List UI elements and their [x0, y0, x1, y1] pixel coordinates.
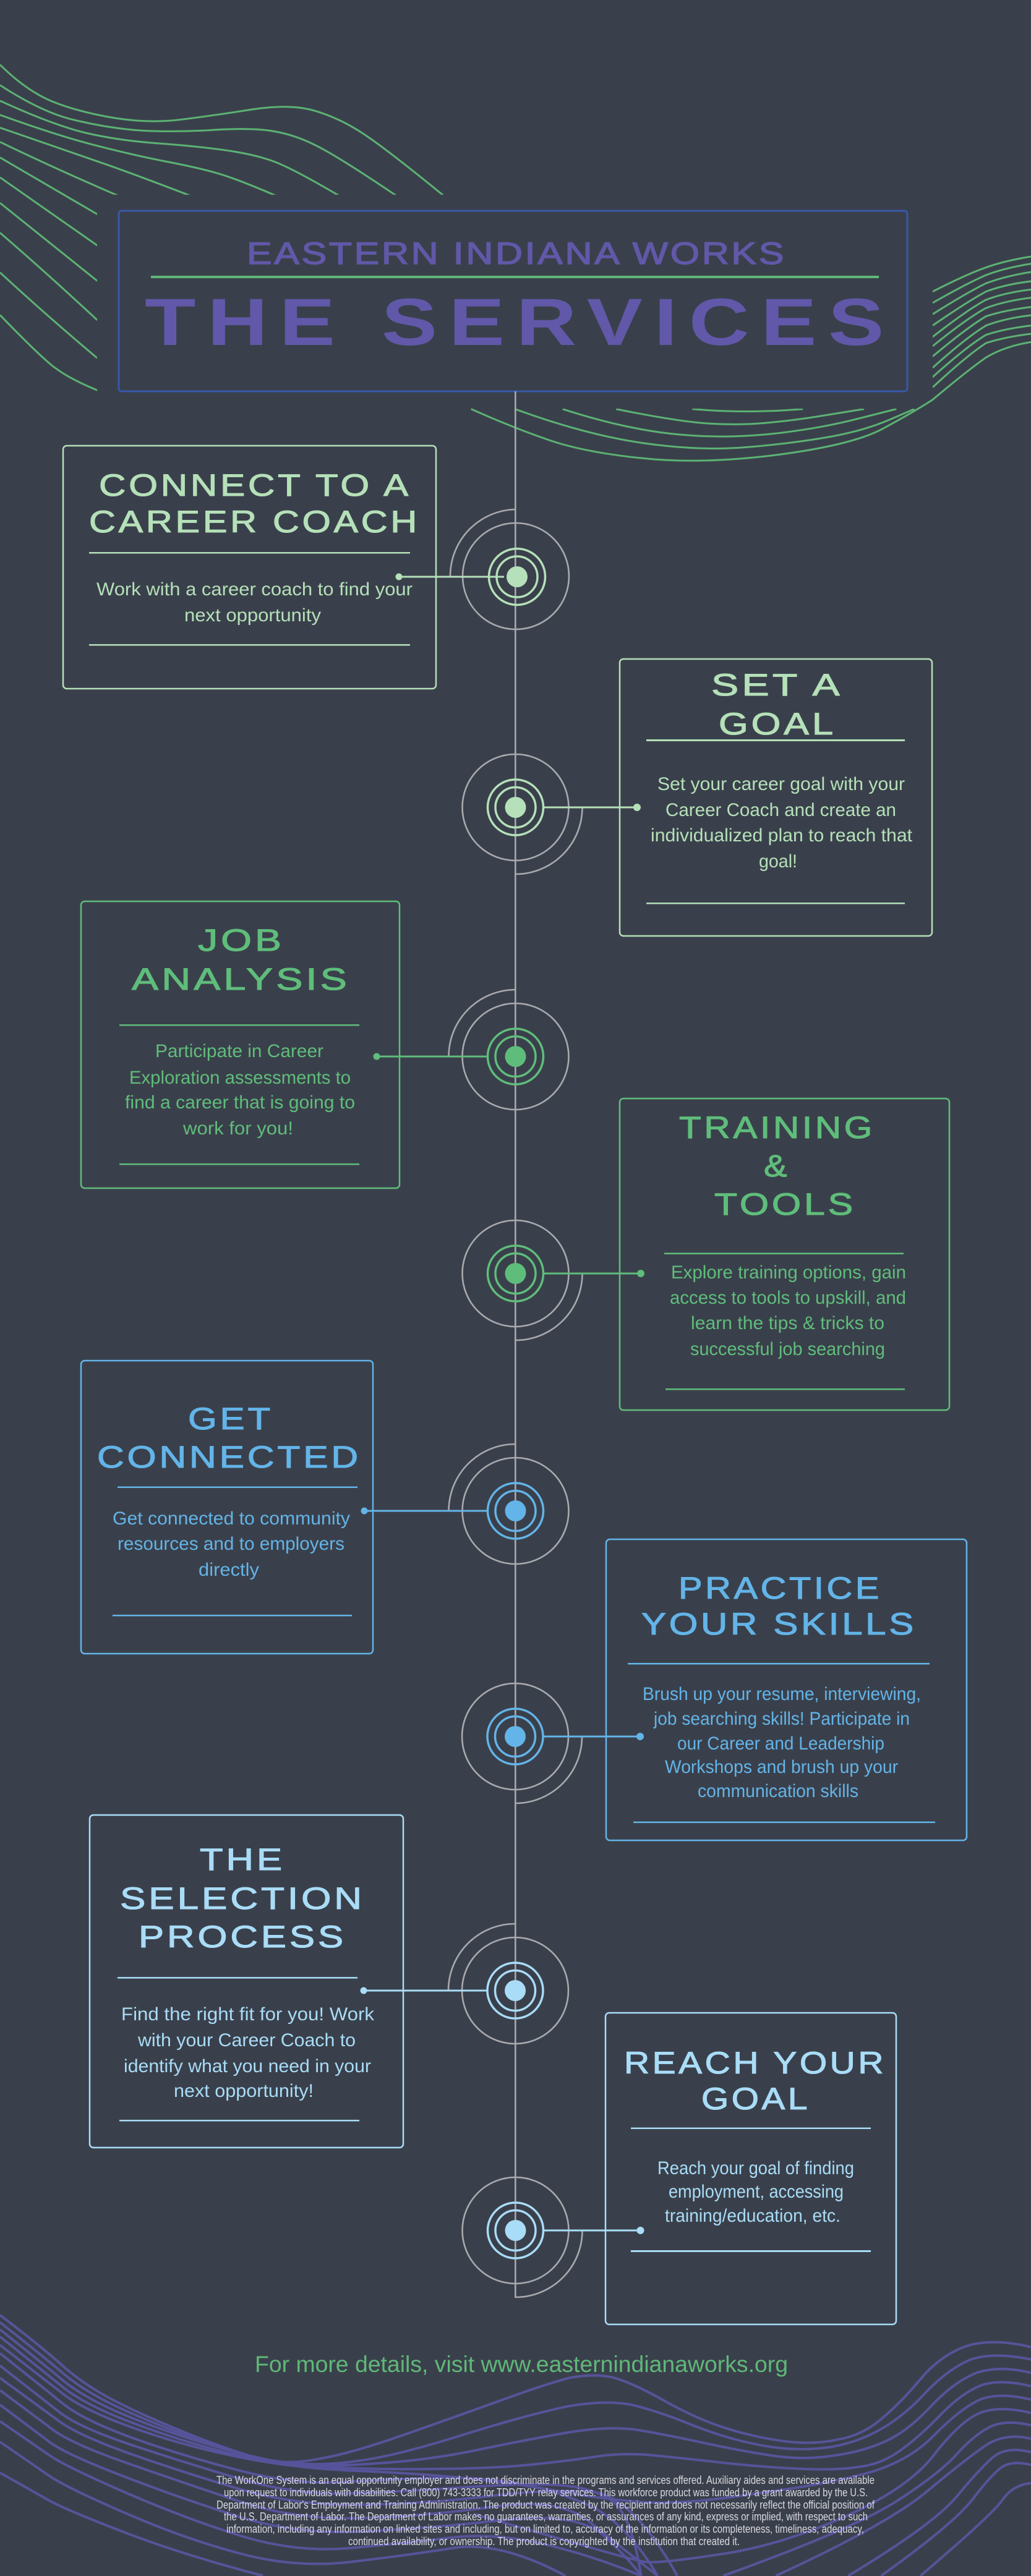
description: Find the right fit for you! Work — [121, 2004, 375, 2025]
description: goal! — [759, 851, 797, 872]
heading: JOB — [198, 923, 284, 958]
heading: TOOLS — [714, 1187, 856, 1222]
description: access to tools to upskill, and — [670, 1288, 906, 1308]
legal disclaimer: Department of Labor's Employment and Training Administration. The product was created by the recipient and does not necessarily reflect the official position of — [216, 2499, 875, 2511]
heading — [120, 1842, 365, 1954]
description: Get connected to community — [113, 1508, 350, 1529]
card 8: reach your goal — [605, 2013, 896, 2324]
heading: ANALYSIS — [132, 962, 350, 997]
description — [113, 1508, 350, 1580]
description: Reach your goal of finding — [657, 2158, 854, 2179]
node 3 — [374, 990, 569, 1110]
description: communication skills — [698, 1781, 858, 1801]
heading — [89, 468, 420, 539]
description: Participate in Career — [155, 1041, 323, 1061]
card 2: set a goal — [620, 659, 932, 936]
description: learn the tips & tricks to — [691, 1313, 884, 1333]
description: Career Coach and create an — [665, 800, 896, 820]
description — [657, 2158, 854, 2226]
description — [125, 1041, 355, 1139]
description: with your Career Coach to — [137, 2030, 356, 2051]
bottom purple wave lines — [0, 2315, 1031, 2576]
heading: PROCESS — [139, 1919, 346, 1954]
legal disclaimer: The WorkOne System is an equal opportunity employer and does not discriminate in the programs and services offered. Auxiliary aides and services are available — [216, 2474, 875, 2486]
description: resources and to employers — [118, 1534, 344, 1554]
card 1: connect to a career coach — [63, 446, 436, 689]
card 3: job analysis — [81, 901, 400, 1188]
legal disclaimer: the U.S. Department of Labor. The Department of Labor makes no guarantees, warranties, or assurances of any kind, express or implied, with respect to such — [224, 2510, 868, 2523]
heading: TRAINING — [679, 1110, 875, 1145]
heading: GET — [188, 1401, 273, 1436]
heading: YOUR SKILLS — [641, 1607, 917, 1641]
description: successful job searching — [690, 1339, 885, 1359]
description: next opportunity! — [174, 2081, 314, 2101]
description: job searching skills! Participate in — [653, 1709, 910, 1729]
heading: CONNECT TO A — [99, 468, 411, 503]
heading: THE — [200, 1842, 285, 1877]
lowest green arc joining the right wave — [471, 342, 1031, 461]
node 6 — [462, 1683, 644, 1803]
legal disclaimer — [216, 2474, 875, 2548]
heading: GOAL — [719, 707, 836, 741]
legal disclaimer: information, including any information on linked sites and including, but on limited to, accuracy of the information or its completeness, timeliness, adequacy, — [226, 2523, 864, 2535]
card 7: the selection process — [90, 1815, 403, 2148]
description: work for you! — [182, 1118, 293, 1139]
website call to action: For more details, visit www.easternindianaworks.org — [255, 2352, 788, 2377]
subtitle: EASTERN INDIANA WORKS — [247, 236, 786, 271]
description — [670, 1262, 906, 1359]
description: individualized plan to reach that — [651, 825, 913, 846]
description: find a career that is going to — [125, 1092, 355, 1113]
description: employment, accessing — [669, 2182, 844, 2202]
description: Brush up your resume, interviewing, — [643, 1684, 921, 1704]
description: Work with a career coach to find your — [96, 579, 413, 600]
title panel — [119, 211, 907, 391]
description: Explore training options, gain — [671, 1262, 906, 1283]
card 6: practice your skills — [606, 1539, 967, 1840]
description: our Career and Leadership — [677, 1733, 884, 1754]
heading: SELECTION — [120, 1881, 365, 1916]
description — [121, 2004, 375, 2101]
heading: REACH YOUR — [624, 2046, 886, 2080]
card 5: get connected — [81, 1361, 373, 1654]
node 7 — [360, 1924, 568, 2044]
heading — [711, 668, 843, 741]
node 8 — [463, 2177, 644, 2297]
right green wave lines — [515, 257, 1031, 449]
wave mask behind title — [97, 195, 933, 409]
node 5 — [361, 1444, 569, 1564]
description: directly — [199, 1560, 259, 1580]
heading — [132, 923, 350, 997]
node 2 — [463, 754, 641, 874]
description — [643, 1684, 921, 1801]
node 4 — [463, 1220, 644, 1340]
description: Set your career goal with your — [657, 774, 905, 794]
heading: CONNECTED — [97, 1440, 361, 1474]
heading — [624, 2046, 886, 2116]
heading: PRACTICE — [678, 1571, 882, 1605]
heading: GOAL — [701, 2081, 810, 2116]
card 4: training and tools — [620, 1099, 949, 1410]
legal disclaimer: upon request to individuals with disabilities. Call (800) 743-3333 for TDD/TYY relay services. This workforce product was funded by a grant awarded by the U.S. — [224, 2486, 868, 2499]
node 1 — [396, 509, 569, 629]
legal disclaimer: continued availability, or ownership. The product is copyrighted by the institution that created it. — [348, 2535, 740, 2548]
description — [651, 774, 913, 872]
description: next opportunity — [184, 605, 321, 626]
heading — [679, 1110, 875, 1222]
heading: & — [764, 1149, 790, 1183]
heading — [641, 1571, 917, 1641]
description: Exploration assessments to — [129, 1068, 351, 1088]
top left green wave lines — [0, 65, 444, 390]
description: training/education, etc. — [665, 2206, 841, 2226]
description: Workshops and brush up your — [665, 1757, 898, 1777]
main title: THE SERVICES — [145, 284, 896, 359]
heading: CAREER COACH — [89, 504, 420, 539]
timeline spine — [515, 391, 516, 2298]
heading — [97, 1401, 361, 1474]
description — [96, 579, 413, 626]
heading: SET A — [711, 668, 843, 702]
description: identify what you need in your — [124, 2056, 371, 2077]
